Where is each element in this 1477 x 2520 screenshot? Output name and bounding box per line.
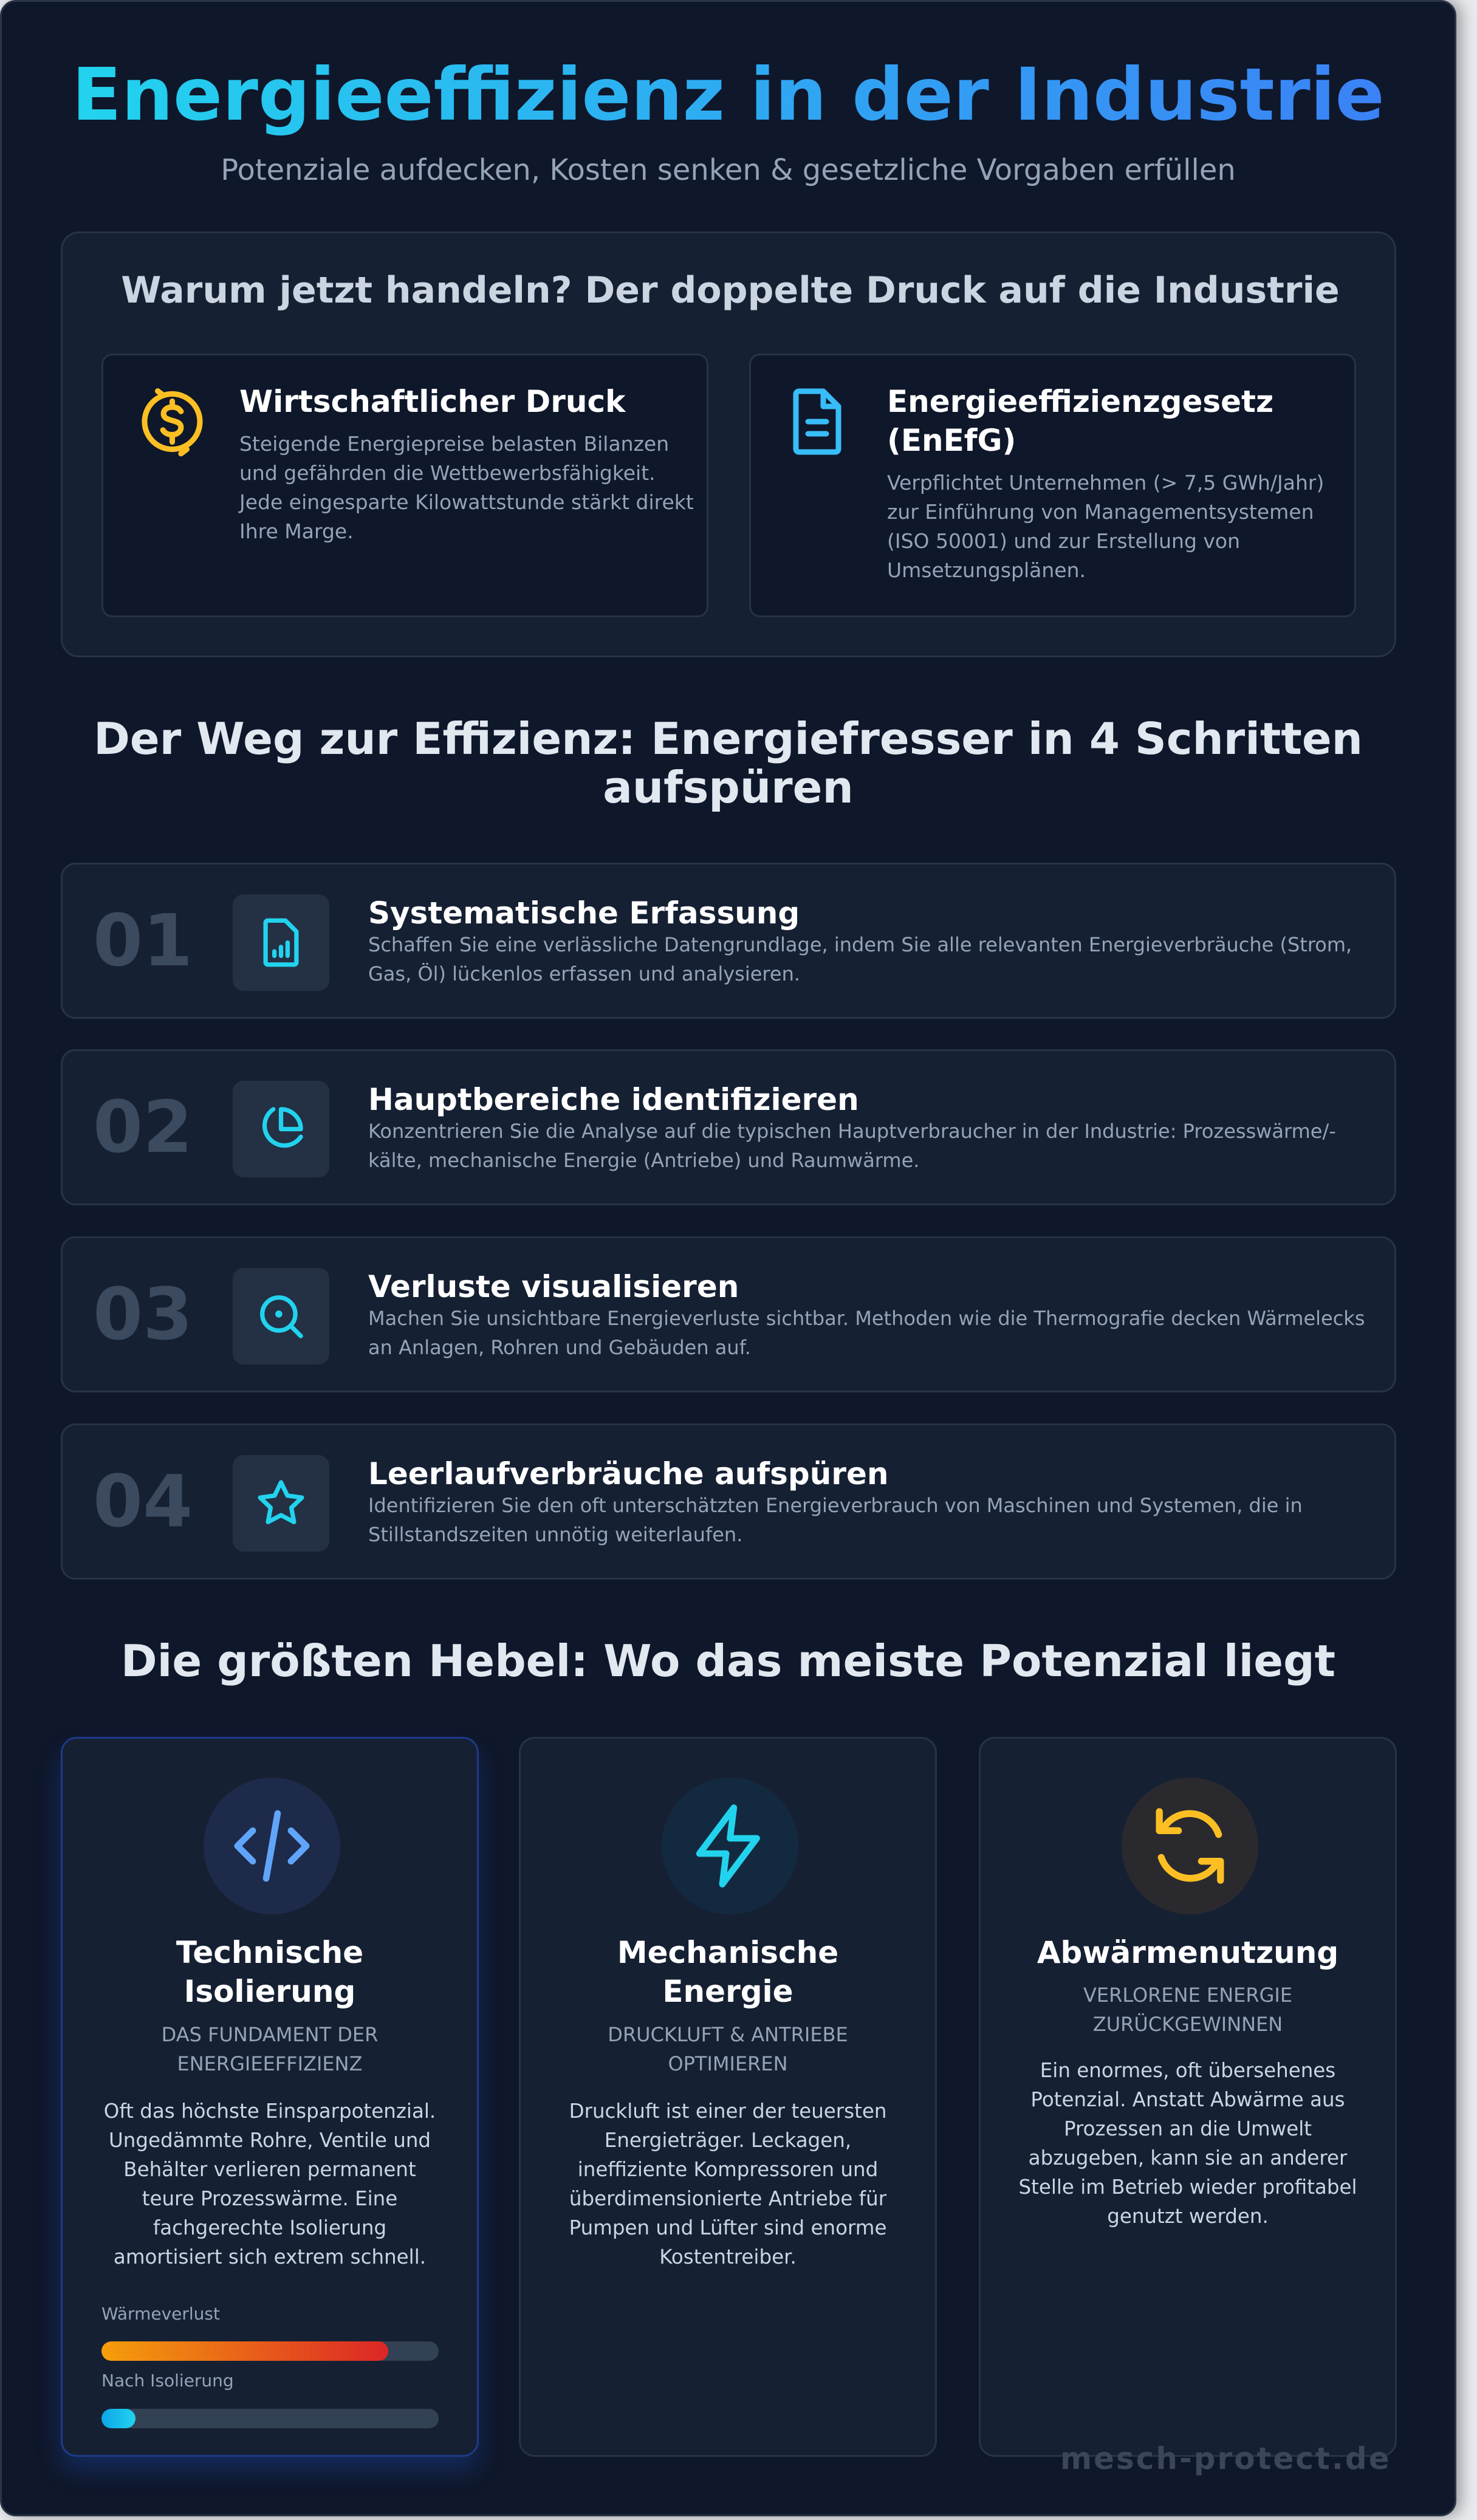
card text: Potenzial. Anstatt Abwärme aus [1030, 2088, 1345, 2111]
heading: 4 Schritte: Der Weg zur Effizienz: Energiefresser in 4 Schritten [94, 713, 1363, 764]
card text: Druckluft ist einer der teuersten [569, 2100, 886, 2123]
card title: Isolierung [184, 1974, 355, 2009]
step 01 [61, 863, 1396, 1019]
icon: document [793, 389, 841, 454]
card text: fachgerechte Isolierung [153, 2216, 386, 2239]
card title: Mechanische [617, 1935, 838, 1970]
body: Umsetzungsplänen. [887, 558, 1086, 582]
card text: Ungedämmte Rohre, Ventile und [109, 2129, 431, 2152]
card text: genutzt werden. [1107, 2205, 1269, 2228]
panel heading: Warum jetzt handeln? Der doppelte Druck auf die Industrie [121, 269, 1340, 312]
number: 02 [93, 1085, 193, 1169]
step title: Hauptbereiche identifizieren [368, 1082, 859, 1117]
number: 03 [93, 1272, 193, 1356]
step 02 [61, 1049, 1396, 1205]
step text [368, 1494, 1303, 1546]
step title: Leerlaufverbräuche aufspüren [368, 1456, 888, 1491]
icon: pie chart [233, 1081, 329, 1177]
card title: Energie [662, 1974, 793, 2009]
body: und gefährden die Wettbewerbsfähigkeit. [239, 461, 656, 485]
number: 01 [93, 899, 193, 982]
card: wirtschaftlicher druck [101, 354, 708, 617]
number: 04 [93, 1459, 193, 1543]
body: Ihre Marge. [239, 519, 354, 543]
heading: 4 Schritte: aufspüren [603, 762, 854, 813]
heading: 4 Schritte [94, 713, 1363, 813]
step text: an Anlagen, Rohren und Gebäuden auf. [368, 1336, 751, 1359]
card text: Oft das höchste Einsparpotenzial. [104, 2100, 436, 2123]
card text: ineffiziente Kompressoren und [578, 2158, 878, 2181]
step title: Verluste visualisieren [368, 1269, 739, 1304]
card subtitle: VERLORENE ENERGIE [1083, 1984, 1292, 2007]
step text: kälte, mechanische Energie (Antriebe) und Raumwärme. [368, 1149, 919, 1172]
heading: größte Hebel: Die größten Hebel: Wo das meiste Potenzial liegt [121, 1635, 1335, 1686]
body: Verpflichtet Unternehmen (> 7,5 GWh/Jahr) [887, 471, 1324, 495]
card text: Ein enormes, oft übersehenes [1040, 2059, 1335, 2082]
card subtitle: DAS FUNDAMENT DER [162, 2023, 378, 2046]
step text [368, 1307, 1365, 1359]
bar chart: wärmeverlust vs nach isolierung: Nach Isolierung [101, 2371, 234, 2391]
icon: lightning [662, 1778, 798, 1914]
card text: teure Prozesswärme. Eine [142, 2187, 397, 2210]
body: zur Einführung von Managementsystemen [887, 500, 1314, 524]
icon: search [233, 1268, 329, 1364]
card text: Behälter verlieren permanent [123, 2158, 416, 2181]
step text: Identifizieren Sie den oft unterschätzten Energieverbrauch von Maschinen und Systemen, die in [368, 1494, 1303, 1517]
subtitle: Potenziale aufdecken, Kosten senken & gesetzliche Vorgaben erfüllen [221, 153, 1236, 187]
title [887, 384, 1273, 458]
card text: überdimensionierte Antriebe für [569, 2187, 886, 2210]
title: Wirtschaftlicher Druck [239, 384, 625, 419]
step text: Stillstandszeiten unnötig weiterlaufen. [368, 1523, 742, 1546]
step text [368, 933, 1352, 985]
card title [176, 1935, 363, 2009]
body [887, 471, 1324, 582]
body: Jede eingesparte Kilowattstunde stärkt direkt [239, 490, 694, 514]
card text [104, 2100, 436, 2268]
card subtitle: ZURÜCKGEWINNEN [1093, 2013, 1283, 2036]
body [238, 432, 694, 543]
card subtitle: ENERGIEEFFIZIENZ [177, 2052, 362, 2075]
card title: Abwärmenutzung [1037, 1935, 1338, 1970]
card text: Stelle im Betrieb wieder profitabel [1018, 2176, 1357, 2199]
card title [617, 1935, 838, 2009]
step text: Konzentrieren Sie die Analyse auf die typischen Hauptverbraucher in der Industrie: Prozesswärme/- [368, 1120, 1336, 1143]
card: EnEfG [749, 354, 1356, 617]
panel: warum jetzt handeln [61, 231, 1396, 657]
title: (EnEfG) [887, 423, 1016, 458]
card text [1018, 2059, 1357, 2228]
card text: Energieträger. Leckagen, [605, 2129, 851, 2152]
title: Energieeffizienz in der Industrie [72, 53, 1385, 137]
card: technische isolierung [61, 1737, 479, 2457]
card subtitle [1083, 1984, 1292, 2036]
card text: amortisiert sich extrem schnell. [114, 2245, 426, 2268]
card: mechanische energie [519, 1737, 937, 2457]
step text [368, 1120, 1336, 1172]
body: (ISO 50001) und zur Erstellung von [887, 529, 1240, 553]
card subtitle [608, 2023, 848, 2075]
icon: refresh [1122, 1778, 1258, 1914]
card text: Kostentreiber. [659, 2245, 797, 2268]
step title: Systematische Erfassung [368, 895, 800, 931]
card subtitle: OPTIMIEREN [668, 2052, 788, 2075]
body: Steigende Energiepreise belasten Bilanzen [239, 432, 669, 456]
step text: Schaffen Sie eine verlässliche Datengrundlage, indem Sie alle relevanten Energieverbräuche (Strom, [368, 933, 1352, 956]
card title: Technische [176, 1935, 363, 1970]
watermark: mesch-protect.de [1060, 2441, 1391, 2476]
step text: Machen Sie unsichtbare Energieverluste sichtbar. Methoden wie die Thermografie decken Wärmelecks [368, 1307, 1365, 1330]
card subtitle [162, 2023, 378, 2075]
card: abwärmenutzung [979, 1737, 1397, 2457]
icon: file chart [233, 894, 329, 991]
icon: star [233, 1455, 329, 1552]
step 04 [61, 1423, 1396, 1580]
bar chart: wärmeverlust vs nach isolierung [101, 2304, 439, 2428]
step 03 [61, 1236, 1396, 1392]
card text: Prozessen an die Umwelt [1064, 2117, 1312, 2140]
title: Energieeffizienzgesetz [887, 384, 1273, 419]
bar chart: wärmeverlust vs nach isolierung: Wärmeverlust [101, 2304, 220, 2324]
card subtitle: DRUCKLUFT & ANTRIEBE [608, 2023, 848, 2046]
icon: dollar coin [142, 388, 203, 457]
card text: abzugeben, kann sie an anderer [1029, 2146, 1347, 2169]
step text: Gas, Öl) lückenlos erfassen und analysieren. [368, 962, 800, 985]
card text: Pumpen und Lüfter sind enorme [569, 2216, 886, 2239]
card text [569, 2100, 887, 2268]
icon: code [204, 1778, 340, 1914]
